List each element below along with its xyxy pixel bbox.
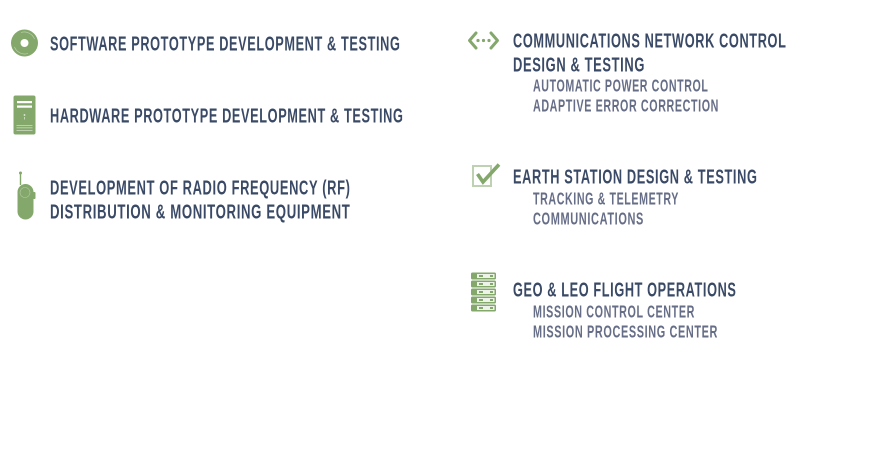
icon: network arrows [470,33,498,48]
item: communications network [470,30,786,116]
icon: server rack [471,272,496,312]
sub-items: mission centers: MISSION CONTROL CENTER [533,302,695,322]
sub-items: power and error correction [533,76,719,116]
sub-items: tracking and communications [533,188,679,228]
item: software prototype [11,30,400,56]
heading: hardware prototype development: HARDWARE PROTOTYPE DEVELOPMENT & TESTING [50,104,404,128]
item: radio frequency equipment [18,172,350,224]
heading: communications network control [513,30,786,76]
icon: handheld radio [18,172,36,220]
heading: radio frequency development: DEVELOPMENT OF RADIO FREQUENCY (RF) [50,176,350,200]
sub-items: mission centers: MISSION PROCESSING CENTER [533,322,718,342]
sub-items: mission centers [533,302,718,342]
item: flight operations [471,272,736,342]
icon: disc [11,30,38,56]
sub-items: power and error correction: AUTOMATIC POWER CONTROL [533,76,708,96]
heading: communications network control: DESIGN & TESTING [513,54,645,76]
sub-items: tracking and communications: COMMUNICATIONS [533,208,644,228]
sub-items: tracking and communications: TRACKING & TELEMETRY [533,188,679,208]
icon: computer tower [14,96,36,134]
sub-items: power and error correction: ADAPTIVE ERROR CORRECTION [533,96,719,116]
panel: left column [11,30,404,224]
item: earth station [473,164,758,228]
item: hardware prototype [14,96,404,134]
heading: geo and leo flight operations: GEO & LEO FLIGHT OPERATIONS [513,278,736,302]
heading: software prototype development: SOFTWARE PROTOTYPE DEVELOPMENT & TESTING [50,32,400,56]
icon: check box [473,164,499,186]
heading: radio frequency development: DISTRIBUTION & MONITORING EQUIPMENT [50,200,350,224]
heading: radio frequency development [50,176,350,224]
panel: right column [470,30,786,342]
